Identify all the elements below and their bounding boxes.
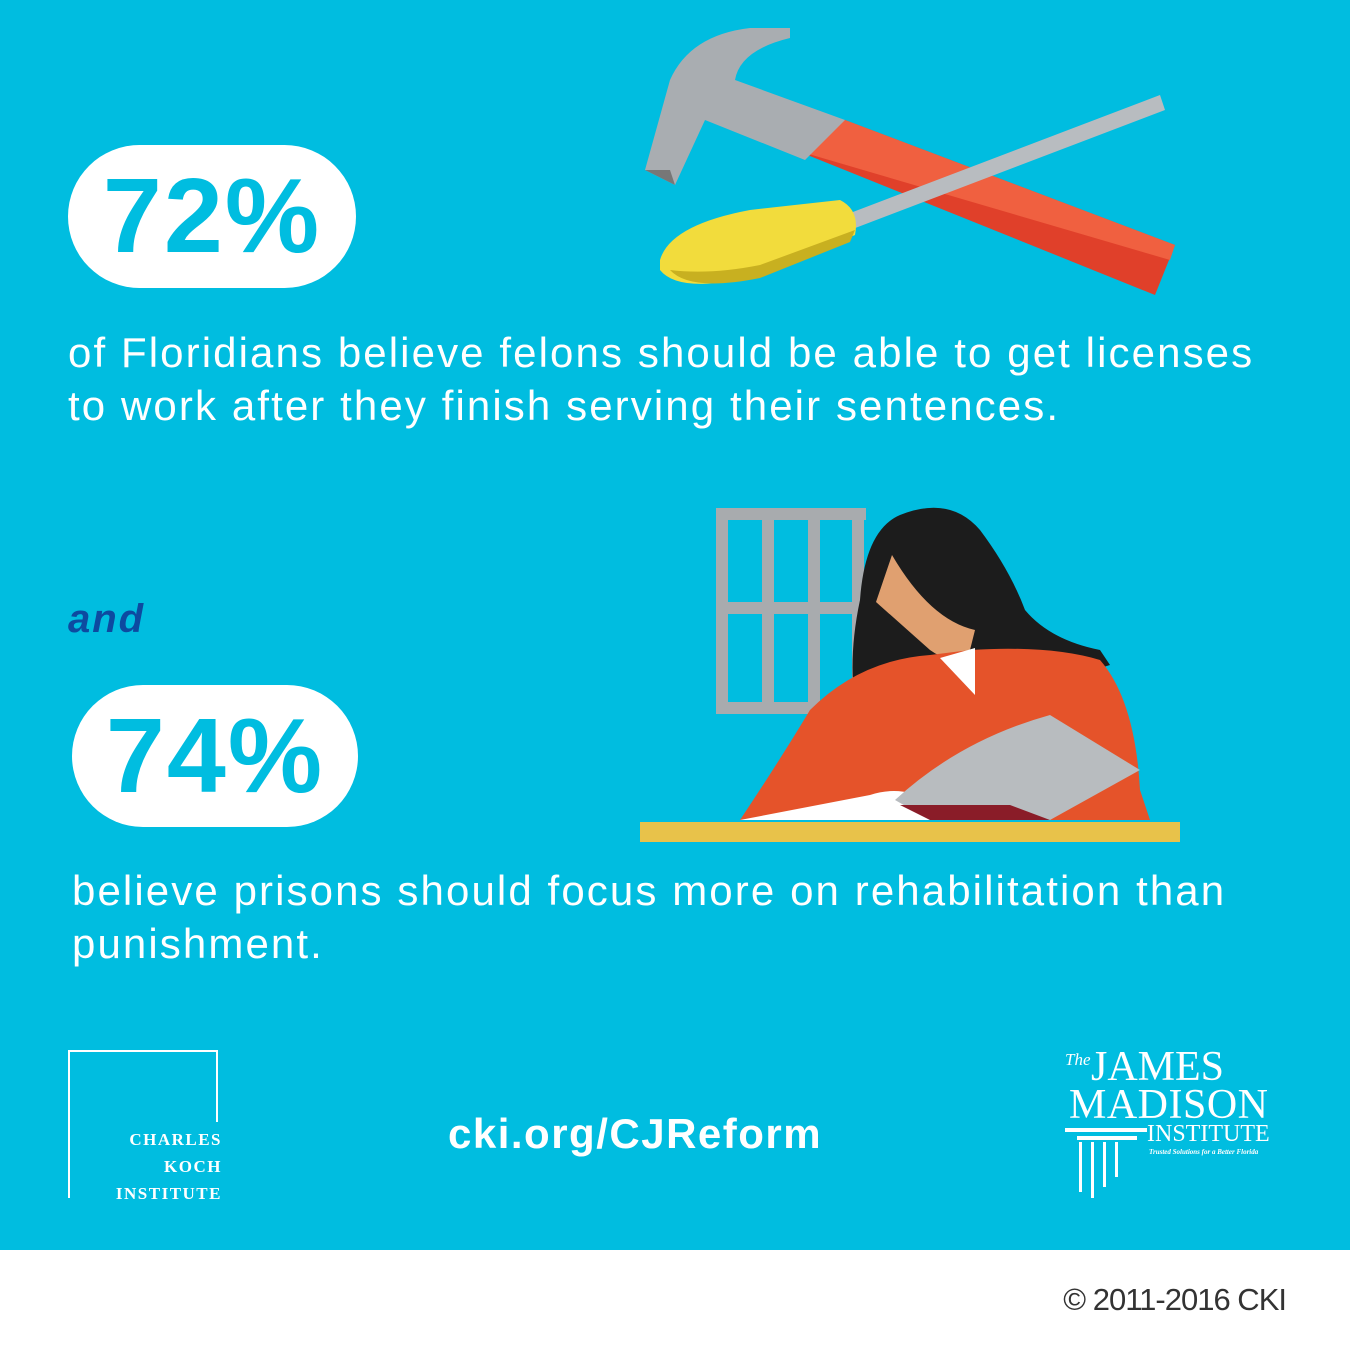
logo: James Madison Institute: Trusted Solutions for a Better Florida: [1149, 1148, 1258, 1156]
text block: rehabilitation: believe prisons should focus more on rehabilitation than: [72, 867, 1226, 914]
hair: [852, 508, 1110, 730]
stat pill: 72%: 72%: [103, 157, 321, 275]
text block: rehabilitation: [72, 867, 1226, 967]
illustration: hammer and screwdriver: [645, 28, 1175, 295]
logo: James Madison Institute: [1065, 1044, 1270, 1198]
shirt: [740, 648, 1150, 820]
stat pill: 74%: [72, 685, 358, 827]
url: cki.org/CJReform: [448, 1110, 822, 1157]
logo: Charles Koch Institute: CHARLES: [129, 1130, 222, 1149]
face: [876, 555, 975, 658]
text block: rehabilitation: punishment.: [72, 920, 324, 967]
hammer head: [645, 28, 845, 185]
logo: James Madison Institute: INSTITUTE: [1147, 1121, 1270, 1147]
logo: Charles Koch Institute: [68, 1050, 222, 1203]
copyright: © 2011-2016 CKI: [1063, 1282, 1286, 1317]
logo: Charles Koch Institute: KOCH: [164, 1157, 222, 1176]
illustration: woman reading in prison: [640, 508, 1180, 842]
hammer handle: [795, 120, 1175, 295]
logo: James Madison Institute: JAMES: [1091, 1044, 1224, 1090]
screwdriver shaft: [845, 95, 1165, 230]
logo: James Madison Institute: MADISON: [1069, 1082, 1269, 1128]
book: [740, 715, 1140, 820]
text block: licenses: to work after they finish serving their sentences.: [68, 382, 1060, 429]
window bars: [716, 508, 866, 714]
logo: James Madison Institute: The: [1065, 1050, 1090, 1069]
logo: Charles Koch Institute: INSTITUTE: [116, 1184, 222, 1203]
screwdriver handle: [660, 200, 856, 284]
text block: licenses: of Floridians believe felons should be able to get licenses: [68, 329, 1254, 376]
stat pill: 72%: [68, 145, 356, 288]
text block: licenses: [68, 329, 1254, 429]
stat pill: 74%: 74%: [106, 697, 324, 815]
desk: [640, 822, 1180, 842]
connector word: and: and: [68, 597, 145, 641]
